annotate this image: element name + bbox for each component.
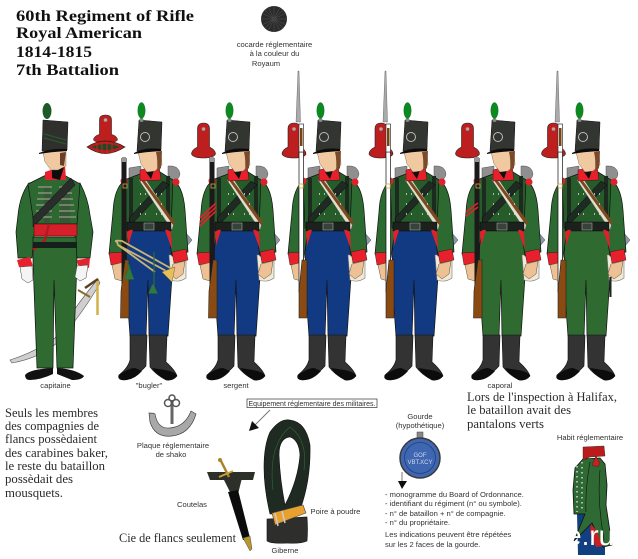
text: Halifax note: Lors de l'inspection à Halifax, bbox=[467, 390, 617, 404]
text: gourde list: - n° du propriétaire. bbox=[385, 518, 450, 527]
caption: shako plate bbox=[137, 441, 209, 459]
text: gourde list: Les indications peuvent être répétées bbox=[385, 530, 511, 539]
text: carabines note: possèdait des bbox=[5, 472, 73, 486]
icon: cocarde bbox=[261, 6, 287, 32]
title: Royal American bbox=[16, 25, 142, 42]
plate: soldat 2 bbox=[369, 123, 393, 158]
text: carabines note bbox=[5, 406, 108, 500]
icon: coutelas bbox=[207, 458, 255, 551]
shako bbox=[42, 120, 68, 151]
watermark: e.ru bbox=[566, 520, 614, 551]
text: gourde list: - n° de bataillon + n° de compagnie. bbox=[385, 509, 506, 518]
figure: soldat with bayonet, blue trousers bbox=[375, 71, 458, 380]
figure: sergent bbox=[197, 102, 280, 380]
cocarde caption: Royaum bbox=[252, 59, 280, 68]
plate: last soldier bbox=[542, 123, 566, 158]
text: carabines note: flancs possèdaient bbox=[5, 432, 98, 446]
callout: equipment: Equipement réglementaire des militaires. bbox=[248, 399, 376, 408]
collar bbox=[45, 165, 66, 180]
text: carabines note: mousquets. bbox=[5, 486, 63, 500]
braid bbox=[44, 186, 70, 223]
icon: gourde bbox=[400, 432, 440, 478]
text: gourde list bbox=[385, 490, 524, 549]
waist belt bbox=[33, 242, 77, 248]
text: carabines note: des compagnies de bbox=[5, 419, 99, 433]
title: 7th Battalion bbox=[16, 62, 119, 79]
caption: shako plate: de shako bbox=[156, 450, 186, 459]
face bbox=[43, 150, 66, 170]
caption: caporal: caporal bbox=[488, 381, 513, 390]
tassels bbox=[125, 252, 157, 293]
sash bbox=[34, 224, 77, 236]
text: gourde list: sur les 2 faces de la gourde. bbox=[385, 540, 480, 549]
text: flank companies note: Cie de flancs seulement bbox=[119, 530, 236, 545]
text: gourde list: - identifiant du régiment (n° ou symbole). bbox=[385, 499, 522, 508]
text: Halifax note bbox=[467, 390, 617, 431]
figure: soldat with bayonet bbox=[288, 71, 371, 380]
caption: gourde: Gourde bbox=[407, 412, 433, 421]
caption: bugler: "bugler" bbox=[136, 381, 163, 390]
bugle bbox=[116, 241, 172, 273]
arrow: gourde bbox=[398, 472, 407, 489]
caption: sergent: sergent bbox=[223, 381, 250, 390]
title: 60th Regiment of Rifle bbox=[16, 8, 194, 25]
icon: gourde: GOF bbox=[414, 453, 427, 459]
arrow: equipment bbox=[249, 410, 270, 431]
boots bbox=[25, 368, 84, 380]
text: Halifax note: le bataillon avait des bbox=[467, 403, 571, 417]
icon: habit bbox=[573, 446, 612, 555]
caption: giberne: Giberne bbox=[271, 546, 299, 555]
figure: capitaine bbox=[10, 103, 100, 380]
legs bbox=[33, 237, 77, 368]
text: gourde list: - monogramme du Board of Ordonnance. bbox=[385, 490, 524, 499]
figure: soldier in green trousers bbox=[547, 71, 630, 380]
cocarde caption: cocarde réglementaire bbox=[237, 40, 312, 49]
cross belt bbox=[33, 178, 75, 227]
plate: soldat 1 bbox=[282, 123, 306, 158]
text: carabines note: le reste du bataillon bbox=[5, 459, 106, 473]
sabre bbox=[10, 279, 100, 363]
caption: gourde bbox=[396, 412, 445, 430]
caption: gourde: (hypothétique) bbox=[396, 421, 445, 430]
icon: gourde: VBT.XCY bbox=[407, 460, 433, 466]
caption: shako plate: Plaque réglementaire bbox=[137, 441, 209, 450]
cocarde caption: à la couleur du bbox=[250, 49, 299, 58]
coat bbox=[28, 175, 80, 224]
cocarde caption bbox=[237, 40, 312, 68]
plate: officer shako bbox=[87, 115, 125, 154]
figure: caporal bbox=[462, 102, 545, 380]
text: carabines note: des carabines baker, bbox=[5, 446, 108, 460]
icon: giberne bbox=[264, 420, 310, 543]
caption: habit: Habit réglementaire bbox=[557, 433, 623, 442]
caption: capitaine: capitaine bbox=[40, 381, 71, 390]
gloves bbox=[20, 266, 33, 283]
icon: shako plate bbox=[149, 395, 196, 436]
caption: poire a poudre: Poire à poudre bbox=[310, 507, 360, 516]
caption: coutelas: Coutelas bbox=[177, 500, 207, 509]
plate: caporal bbox=[456, 123, 480, 158]
title: 1814-1815 bbox=[16, 44, 92, 61]
figure: bugler bbox=[109, 102, 192, 380]
text: carabines note: Seuls les membres bbox=[5, 406, 98, 420]
plume bbox=[42, 103, 52, 119]
plate: sergent bbox=[192, 123, 216, 158]
text: Halifax note: pantalons verts bbox=[467, 417, 544, 431]
cuffs bbox=[17, 257, 33, 267]
title bbox=[16, 8, 194, 79]
